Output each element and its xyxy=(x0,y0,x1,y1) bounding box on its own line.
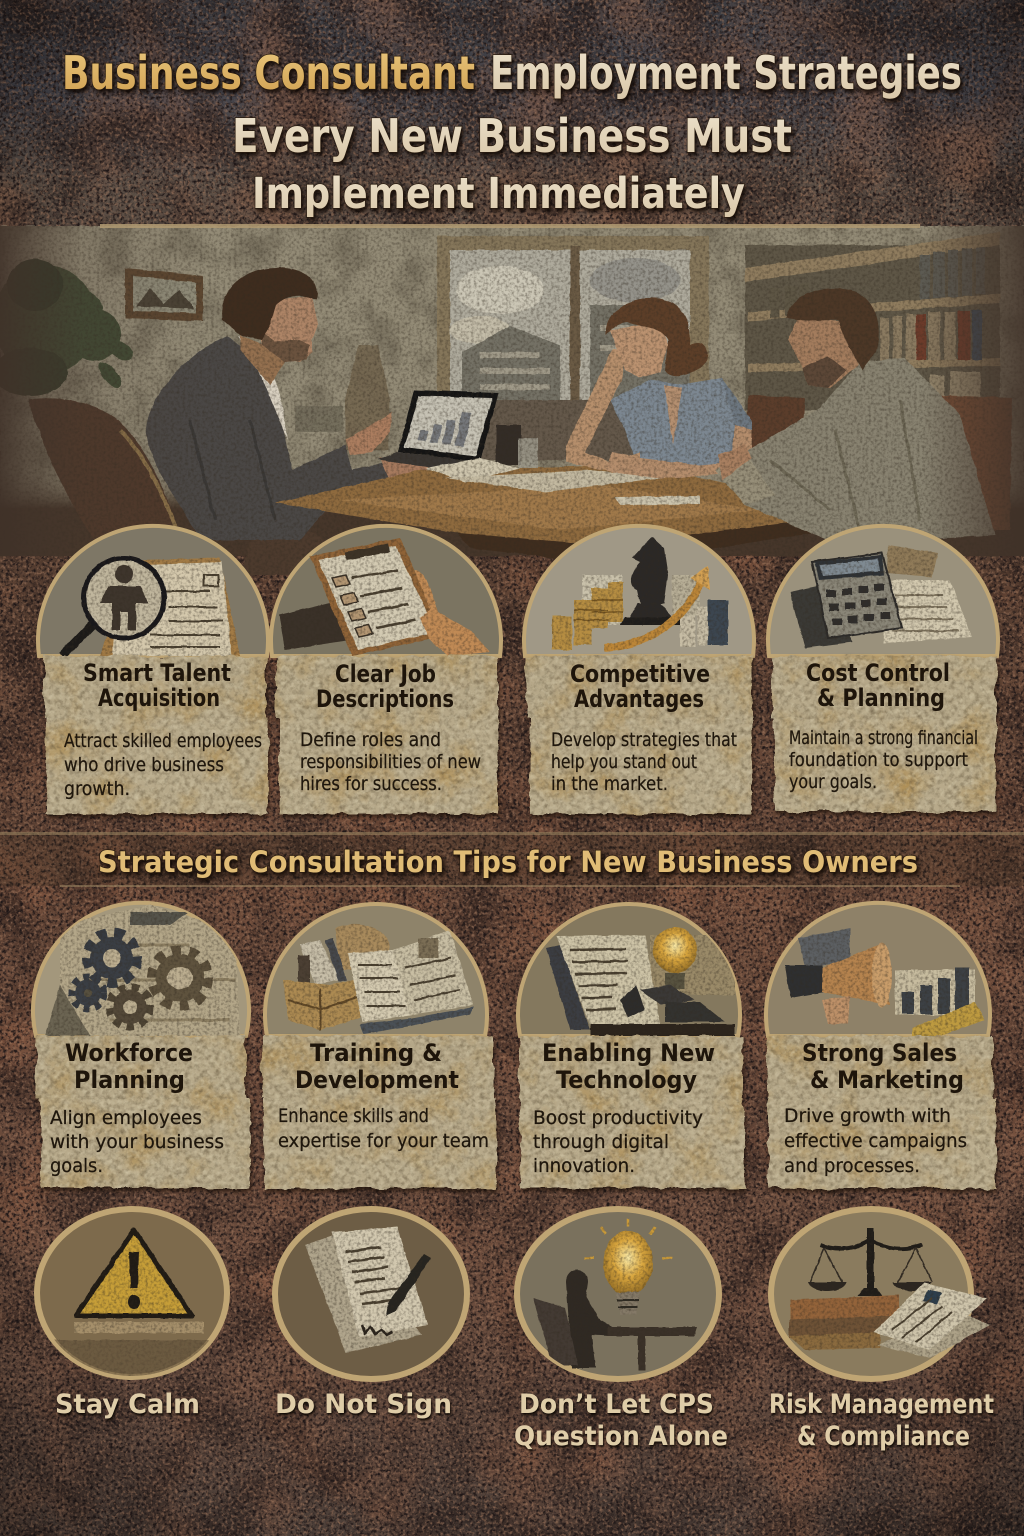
panel: Enabling New Technology xyxy=(518,904,744,1188)
hero illustration: consultant meeting xyxy=(0,224,1024,575)
card description: who drive business xyxy=(64,754,224,776)
description plaque xyxy=(279,718,498,814)
title plaque xyxy=(767,1036,993,1098)
card description: expertise for your team xyxy=(278,1130,489,1152)
icon: magnifier over resume xyxy=(38,526,268,656)
title plaque xyxy=(526,656,752,718)
card title: Workforce xyxy=(65,1039,193,1067)
card title: Smart Talent xyxy=(83,659,231,687)
icon: document and pen xyxy=(275,1209,467,1379)
panel: Competitive Advantages xyxy=(524,526,754,814)
icon: calculator and paperwork xyxy=(768,526,998,656)
low cabinet under window xyxy=(437,400,727,460)
card description xyxy=(300,729,481,795)
middle and right chairs xyxy=(745,395,805,470)
badge: Don't Let CPS Question Alone xyxy=(514,1209,728,1452)
badge: Stay Calm xyxy=(36,1209,227,1420)
title plaque xyxy=(519,1036,743,1098)
card description: and processes. xyxy=(784,1155,920,1177)
card description: through digital xyxy=(533,1131,669,1153)
panel: Smart Talent Acquisition xyxy=(38,526,268,814)
card title xyxy=(542,1039,715,1094)
card description: your goals. xyxy=(789,771,877,793)
window with city view xyxy=(437,236,709,416)
title: Business Consultant xyxy=(62,46,475,100)
title plaque xyxy=(36,1036,246,1098)
card title: Training & xyxy=(310,1039,442,1067)
icon: warning triangle xyxy=(36,1209,227,1380)
lamp and decor behind the table xyxy=(345,345,390,450)
panel: Cost Control & Planning xyxy=(768,526,998,812)
card title: Advantages xyxy=(574,685,704,713)
description plaque xyxy=(530,718,752,814)
title: Every New Business Must xyxy=(232,109,792,163)
bookshelf xyxy=(745,232,1000,410)
card title: Cost Control xyxy=(806,659,950,687)
picture frame xyxy=(125,268,203,321)
card title: Enabling New xyxy=(542,1039,715,1067)
badge: Risk Management & Compliance xyxy=(769,1209,994,1452)
badge label xyxy=(514,1389,728,1452)
card description: with your business xyxy=(50,1131,224,1153)
card description xyxy=(64,730,262,800)
panel: Training & Development xyxy=(262,904,496,1188)
badge label: & Compliance xyxy=(797,1421,970,1452)
title plaque xyxy=(772,656,996,718)
plant xyxy=(0,259,136,396)
description plaque xyxy=(520,1098,744,1188)
description plaque xyxy=(774,718,996,812)
panel: Workforce Planning xyxy=(33,903,250,1188)
icon: clipboard checklist xyxy=(271,526,501,656)
card title: Clear Job xyxy=(335,660,436,688)
icon: open book and crate xyxy=(265,904,487,1036)
card title xyxy=(83,659,231,712)
description plaque xyxy=(264,1098,496,1188)
icon: gears xyxy=(33,903,249,1036)
title plaque xyxy=(262,1036,494,1098)
icon: megaphone and bar chart xyxy=(766,903,990,1036)
card title: Technology xyxy=(556,1066,697,1094)
card title xyxy=(65,1039,193,1094)
card title xyxy=(806,659,950,712)
woman xyxy=(566,298,752,478)
card description xyxy=(533,1107,703,1177)
contract papers overflowing the frame xyxy=(874,1283,990,1358)
card title: Planning xyxy=(74,1066,185,1094)
card description xyxy=(789,727,978,793)
icon: scales, books and contract xyxy=(771,1209,990,1379)
card description: Enhance skills and xyxy=(278,1105,429,1127)
badge: Do Not Sign xyxy=(275,1209,467,1420)
hero top rail xyxy=(100,224,920,228)
floor shadow xyxy=(0,470,1024,556)
card description: responsibilities of new xyxy=(300,751,481,773)
icon: person at desk under lightbulb xyxy=(517,1209,719,1379)
card title xyxy=(802,1039,964,1094)
card description: hires for success. xyxy=(300,773,442,795)
card title xyxy=(316,660,454,713)
card title: Descriptions xyxy=(316,685,454,713)
card title: & Planning xyxy=(817,684,945,712)
card description: Drive growth with xyxy=(784,1105,951,1127)
card title: Development xyxy=(295,1066,459,1094)
table xyxy=(275,465,830,545)
panel: Clear Job Descriptions xyxy=(271,526,501,814)
badge label: Don’t Let CPS xyxy=(519,1389,714,1420)
card description: innovation. xyxy=(533,1155,635,1177)
left armchair xyxy=(28,398,190,565)
title: Implement Immediately xyxy=(252,169,745,219)
card description xyxy=(784,1105,967,1177)
laptop with chart xyxy=(378,390,498,472)
card description: growth. xyxy=(64,778,130,800)
card title: Acquisition xyxy=(98,684,220,712)
card description: in the market. xyxy=(551,773,668,795)
card description: foundation to support xyxy=(789,749,968,771)
card description: goals. xyxy=(50,1155,103,1177)
card title xyxy=(295,1039,459,1094)
card description: Attract skilled employees xyxy=(64,730,262,752)
description plaque xyxy=(768,1098,996,1188)
panel: Strong Sales & Marketing xyxy=(766,903,996,1188)
badge label: Question Alone xyxy=(514,1421,728,1452)
description plaque xyxy=(40,1098,250,1188)
card description: help you stand out xyxy=(551,751,697,773)
badge label: Stay Calm xyxy=(55,1389,200,1420)
card description: Define roles and xyxy=(300,729,441,751)
badge label: Do Not Sign xyxy=(275,1389,452,1420)
section heading band: Strategic Consultation Tips for New Business Owners xyxy=(98,845,918,879)
description plaque xyxy=(46,718,268,814)
card description xyxy=(551,729,737,795)
title xyxy=(62,46,962,219)
card description: Develop strategies that xyxy=(551,729,737,751)
glasses on the table xyxy=(496,425,538,468)
card description: Boost productivity xyxy=(533,1107,703,1129)
hero edge fade xyxy=(0,226,1024,556)
card title: Strong Sales xyxy=(802,1039,957,1067)
card description: effective campaigns xyxy=(784,1130,967,1152)
card description xyxy=(278,1105,489,1152)
title plaque xyxy=(44,656,266,718)
section heading band xyxy=(0,832,1024,887)
card title: Competitive xyxy=(570,660,710,688)
icon: document, lightbulb and tablet xyxy=(518,904,740,1036)
office wall xyxy=(0,226,1024,526)
card title: & Marketing xyxy=(810,1066,964,1094)
card description xyxy=(50,1107,224,1177)
title plaque xyxy=(276,656,498,718)
man on the right xyxy=(715,288,995,545)
card description: Align employees xyxy=(50,1107,202,1129)
consultant xyxy=(146,268,428,540)
badge label xyxy=(769,1389,994,1452)
papers on the table xyxy=(425,458,700,505)
icon: chess knight, coins and growth arrow xyxy=(524,526,754,656)
card title xyxy=(570,660,710,713)
